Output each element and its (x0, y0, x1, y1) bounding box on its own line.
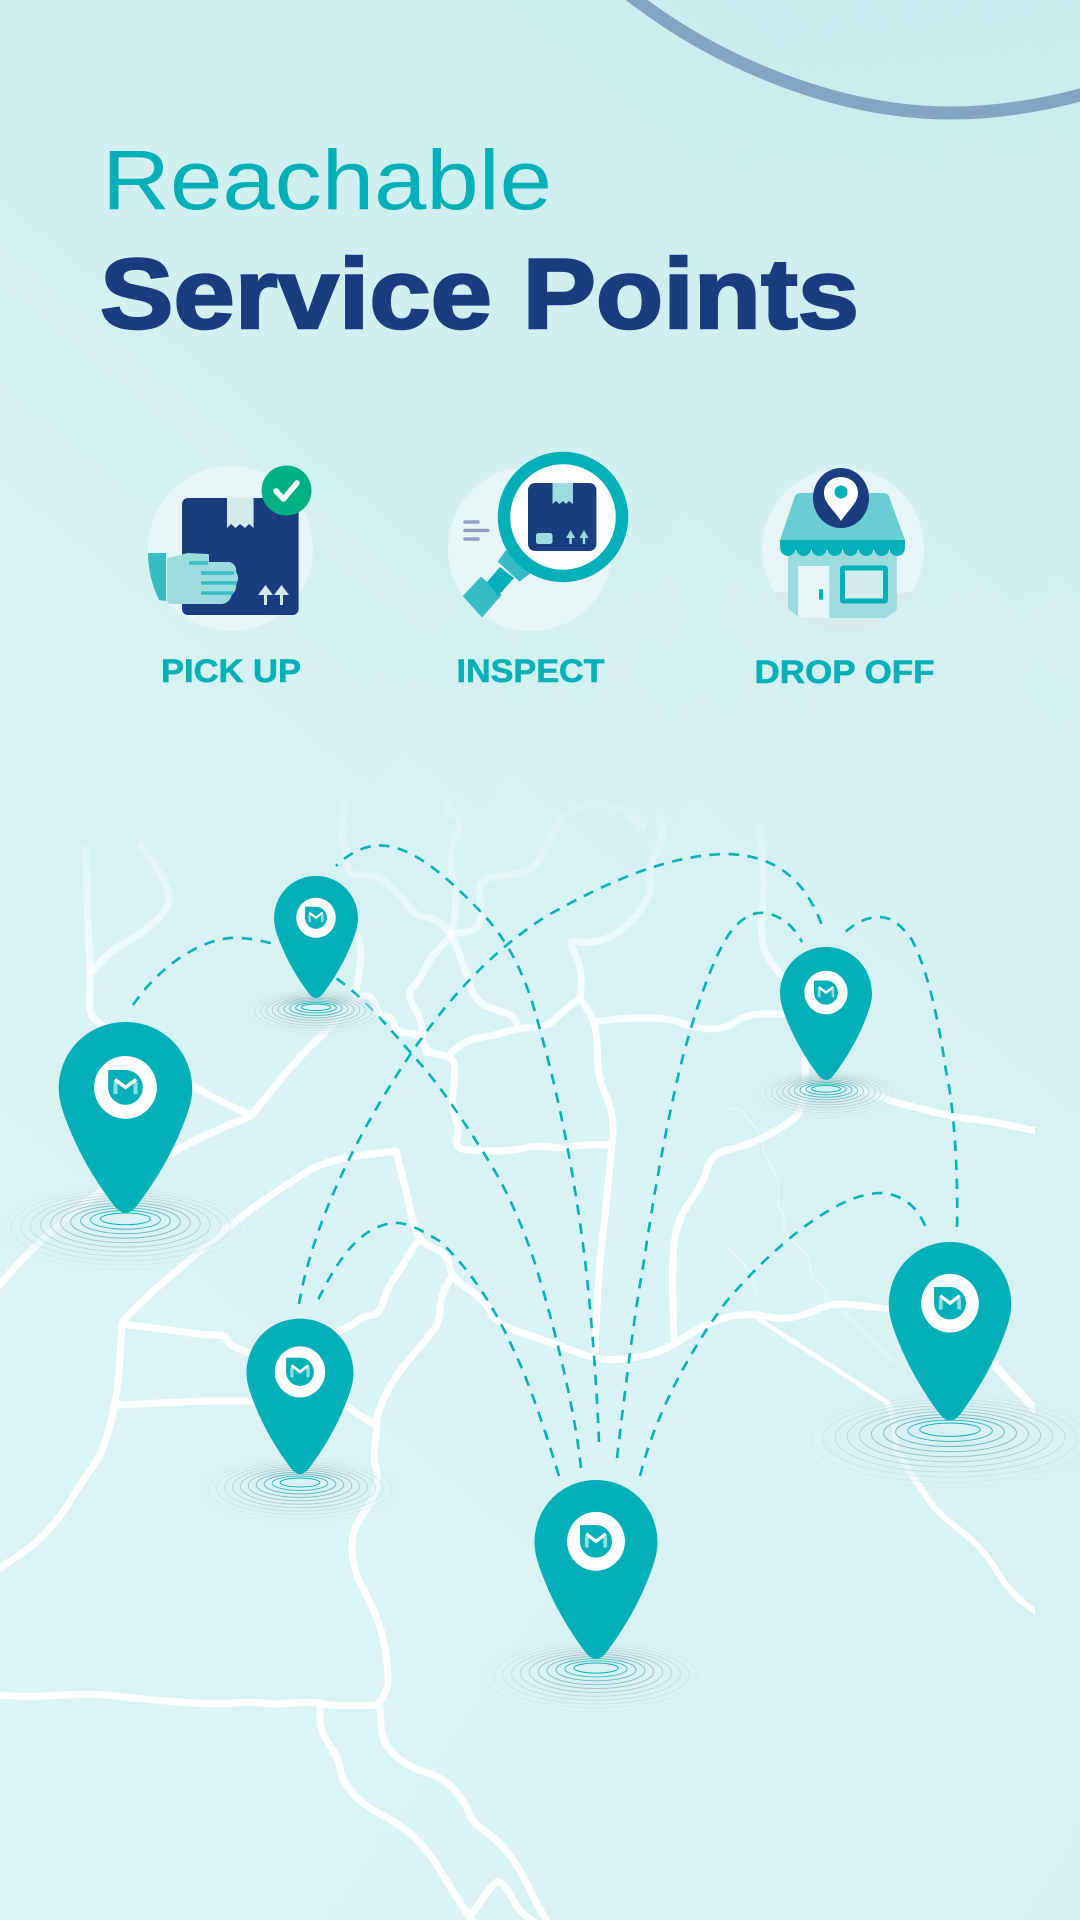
map pin: east (798, 1242, 1080, 1488)
service: inspect (448, 458, 622, 689)
thin minor roads (726, 1109, 895, 1363)
marker: north (274, 876, 358, 998)
ripple rings: west (0, 1187, 251, 1270)
map pin: north (242, 876, 390, 1036)
ripple rings: north (242, 990, 390, 1036)
ripple rings: east (798, 1393, 1080, 1488)
icon: magnifier over box (448, 458, 622, 631)
decorative arc top right (630, 0, 1080, 113)
route: south pin to northeast pin (617, 913, 802, 1458)
marker: east (889, 1242, 1011, 1421)
map pin: northeast (753, 947, 899, 1118)
ripple rings: southwest (200, 1458, 400, 1522)
icon: store with pin (762, 468, 924, 630)
ripple rings: south (484, 1641, 708, 1712)
map pin: southwest (200, 1319, 400, 1522)
road map (0, 798, 1040, 1920)
map pin: west (0, 1022, 251, 1270)
title line: Reachable: Reachable (102, 133, 552, 227)
label: inspect: INSPECT (456, 653, 605, 689)
label: pick up: PICK UP (161, 653, 301, 689)
marker: west (59, 1022, 192, 1213)
route: east pin to northeast pin (841, 917, 957, 1227)
route: south pin to east pin (640, 1193, 927, 1476)
label: drop off: DROP OFF (754, 654, 934, 690)
route: south pin to southwest pin (318, 1223, 559, 1476)
marker: south (534, 1480, 658, 1659)
dashed delivery routes (133, 845, 957, 1476)
service: drop off (754, 468, 934, 690)
marker: northeast (780, 947, 872, 1080)
icon: pick up box in hand (148, 466, 313, 631)
route: west pin to north pin (133, 938, 277, 1005)
route: south pin to north arc (336, 845, 599, 1442)
title line: Service Points: Service Points (100, 238, 859, 349)
route: south pin to north pin (336, 978, 581, 1468)
map pin: south (484, 1480, 708, 1712)
ripple rings: northeast (753, 1071, 899, 1118)
title (100, 133, 859, 349)
route: southwest pin to northeast pin (299, 854, 824, 1304)
service: pick up (148, 466, 313, 689)
marker: southwest (246, 1319, 354, 1474)
